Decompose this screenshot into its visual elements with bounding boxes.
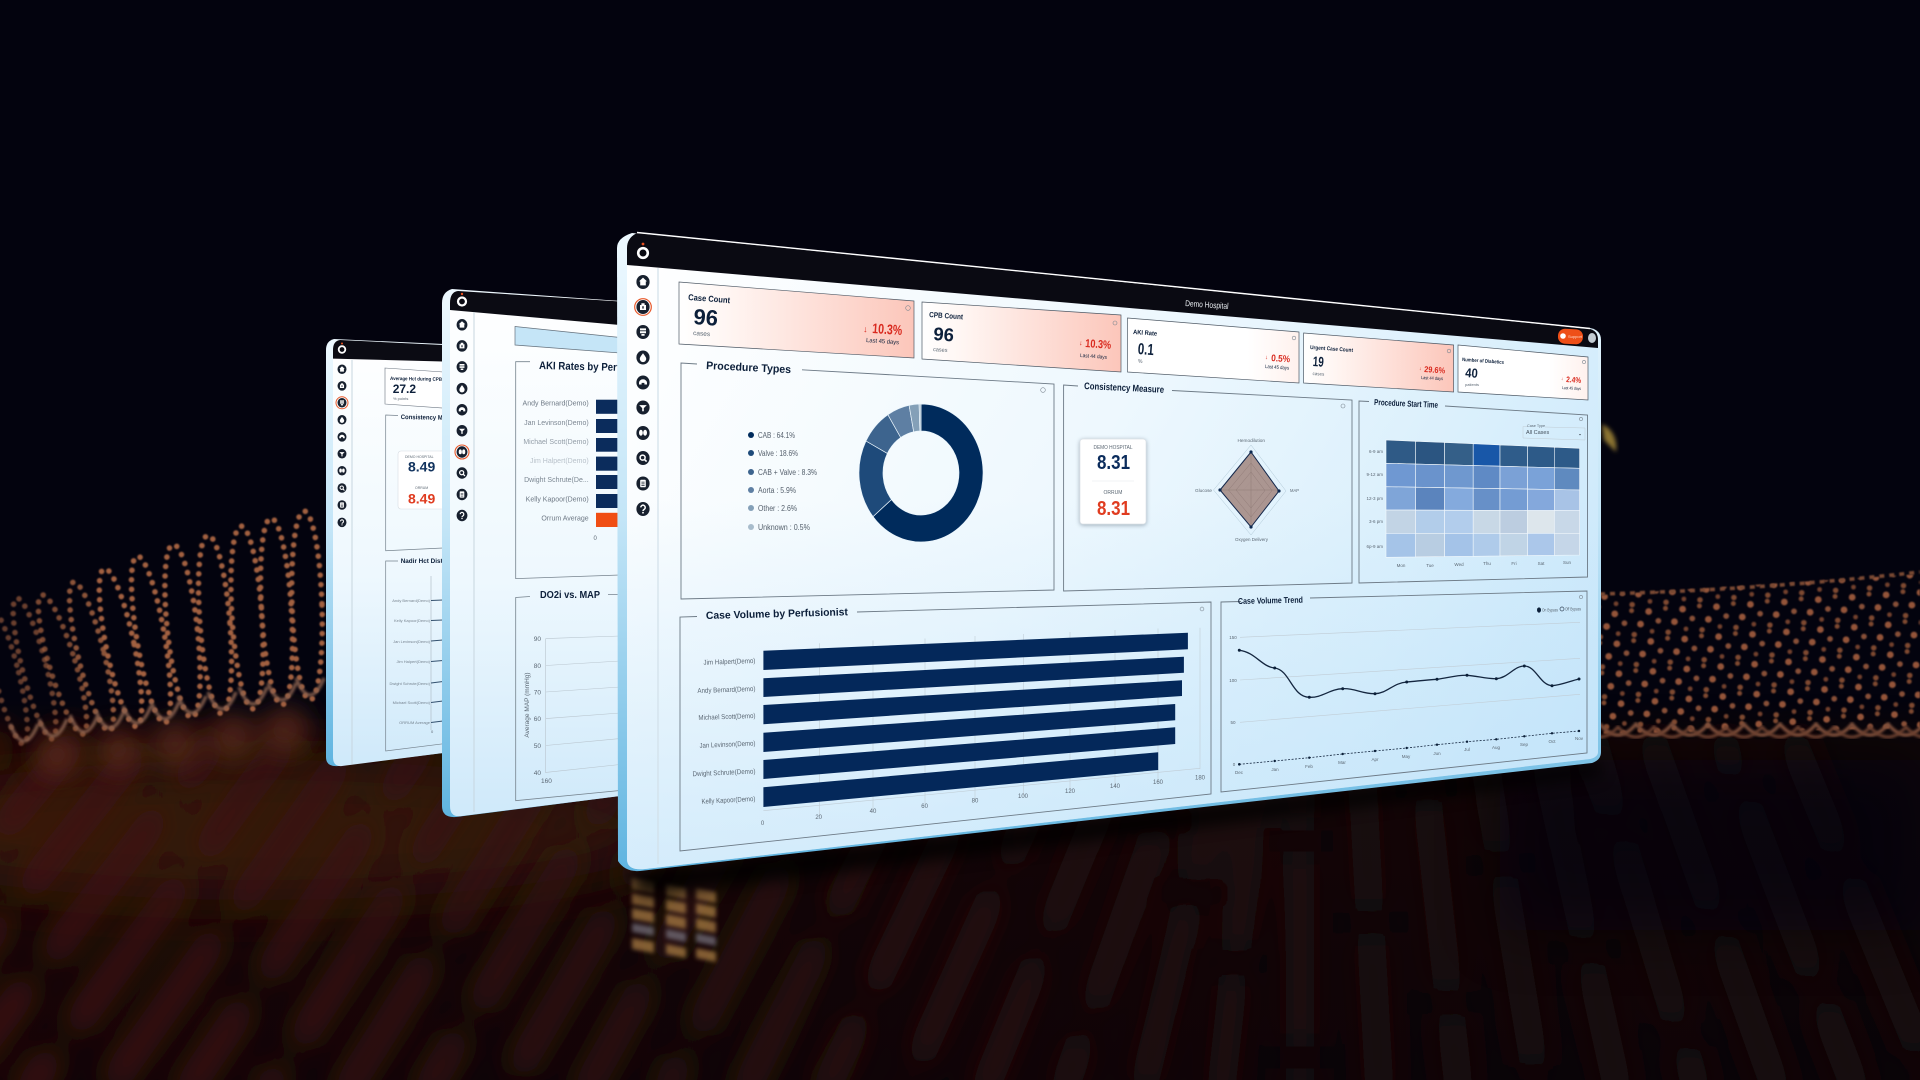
- donut legend: CAB + Valve : 8.3%: [758, 468, 817, 477]
- card: case count: 10.3%: [872, 320, 903, 338]
- card: case count: Case Count: [688, 292, 731, 305]
- user avatar: [1588, 333, 1596, 343]
- main window shadow: [627, 762, 1600, 897]
- window 2 face: [450, 291, 620, 816]
- trend axis labels: 50: [1230, 720, 1236, 725]
- bar chart axis values: [761, 776, 1206, 827]
- window 2 panel: DO2i vs MAP: [516, 589, 620, 801]
- donut legend: Other : 2.6%: [758, 504, 797, 513]
- bar chart names: Andy Bernard(Demo): [697, 686, 756, 695]
- trend axis labels: Mar: [1338, 760, 1346, 765]
- trend axis labels: May: [1402, 754, 1411, 759]
- bar chart axis values: 140: [1110, 784, 1121, 790]
- heatmap axis labels: Fri: [1511, 561, 1517, 566]
- metric box: 8.31: [1097, 452, 1130, 474]
- background: left particle helix: [0, 511, 325, 777]
- window 3 panel: Nadir Hct distribution: Nadir Hct Dist: [401, 558, 444, 565]
- background: floor with blurred stripes: [0, 700, 1920, 1080]
- trend axis labels: Jul: [1464, 747, 1470, 752]
- bar chart axis values: 100: [1018, 794, 1029, 800]
- window 2 panel: DO2i vs MAP: 70: [534, 690, 541, 696]
- sidebar: [657, 268, 659, 864]
- donut legend: Unknown : 0.5%: [758, 523, 810, 532]
- card: AKI rate: AKI Rate: [1133, 329, 1158, 338]
- donut legend: Aorta : 5.9%: [758, 486, 796, 495]
- window 3 frame: [326, 339, 443, 766]
- donut chart: [859, 404, 983, 542]
- window 3 panel: consistency: DEMO HOSPITAL: [405, 455, 434, 459]
- window 3 panel: Nadir Hct distribution: Michael Scott(Demo): [393, 700, 431, 705]
- bar chart names: Dwight Schrute(Demo): [692, 768, 756, 778]
- window 3 card: average Hct: Average Hct during CPB: [390, 376, 442, 383]
- bar chart names: Jim Halpert(Demo): [703, 658, 756, 667]
- trend axis labels: Sep: [1520, 742, 1528, 747]
- panel: case volume by perfusionist: [680, 602, 1211, 851]
- bar chart axis values: 80: [972, 799, 979, 805]
- window 3 panel: Nadir Hct distribution: Jan Levinson(Demo): [393, 639, 431, 644]
- trend legend: On Bypass: [1542, 608, 1558, 612]
- card: CPB count: [922, 302, 1121, 372]
- main window frame: [617, 233, 1601, 871]
- card: AKI rate: %: [1138, 359, 1143, 365]
- window 2 panel: AKI rates: Kelly Kapoor(Demo): [526, 496, 589, 503]
- metric box: 8.31: [1097, 498, 1130, 520]
- window 3 panel: consistency: [386, 414, 458, 551]
- window 2 panel: DO2i vs MAP: 60: [534, 716, 541, 723]
- heatmap axis labels: [1366, 449, 1571, 568]
- window 2 panel: AKI rates: Jim Halpert(Demo): [530, 458, 589, 465]
- window 3 panel: consistency: ORRUM: [415, 486, 428, 490]
- card: urgent case count: Last 44 days: [1421, 375, 1444, 381]
- radar chart: [1195, 438, 1299, 543]
- window 3 face: [333, 340, 443, 766]
- card: urgent case count: Urgent Case Count: [1310, 345, 1353, 354]
- window 2 panel: DO2i vs MAP: 50: [534, 743, 541, 750]
- card: urgent case count: ↓: [1419, 366, 1422, 372]
- window 2 panel: AKI rates: 0: [594, 536, 598, 542]
- trend legend: [1537, 606, 1581, 613]
- card: case count: cases: [693, 330, 711, 338]
- card: CPB count: cases: [933, 347, 948, 354]
- trend legend: Off Bypass: [1565, 606, 1581, 612]
- bar chart names: [692, 658, 756, 806]
- sidebar icons: [635, 275, 651, 516]
- window 2 logo: [458, 293, 466, 306]
- card: CPB count: 96: [933, 323, 955, 345]
- bar chart: [763, 633, 1188, 807]
- heatmap axis labels: 12-3 pm: [1366, 496, 1383, 501]
- metric box: [1080, 439, 1146, 524]
- trend axis labels: [1229, 635, 1584, 775]
- header title: Demo Hospital: [1185, 298, 1229, 311]
- case type dropdown: Case Type: [1527, 424, 1545, 428]
- card: number of diabetics: patients: [1465, 382, 1479, 387]
- trend axis labels: 0: [1233, 762, 1236, 767]
- heading: case volume by perfusionist: Case Volume by Perfusionist: [706, 606, 849, 622]
- card: number of diabetics: Number of Diabetics: [1462, 357, 1504, 366]
- window 2 panel: AKI rates: Andy Bernard(Demo): [523, 400, 589, 407]
- card: case count: [679, 282, 914, 358]
- donut legend: [748, 431, 817, 532]
- window 2 panel: AKI rates: Jan Levinson(Demo): [524, 420, 589, 427]
- radar chart: Oxygen Delivery: [1235, 537, 1269, 543]
- bar chart axis values: 120: [1065, 789, 1076, 795]
- window 3 panel: Nadir Hct distribution: Dwight Schrute(Demo): [390, 681, 431, 686]
- window 2 panel: DO2i vs MAP: 90: [534, 636, 541, 643]
- bar chart names: Michael Scott(Demo): [698, 713, 756, 722]
- window 3 panel: Nadir Hct distribution: Jim Halpert(Demo): [396, 659, 431, 664]
- bar chart axis values: 40: [870, 809, 877, 815]
- heatmap axis labels: 9-12 am: [1366, 472, 1383, 477]
- main window face lower tint: [627, 500, 1598, 869]
- window 2 panel: AKI rates: AKI Rates by Perf: [539, 360, 620, 374]
- donut legend: Valve : 18.6%: [758, 449, 798, 458]
- card: CPB count: Last 44 days: [1080, 353, 1108, 361]
- window 3 top bar: [333, 340, 443, 362]
- trend axis labels: Feb: [1305, 764, 1313, 769]
- window 2 panel: DO2i vs MAP: 80: [534, 663, 541, 670]
- window 3: back dashboard: [326, 339, 458, 766]
- bar chart axis values: 20: [815, 815, 823, 821]
- heatmap axis labels: Sun: [1563, 560, 1571, 565]
- metric box: ORRUM: [1104, 490, 1122, 496]
- panel: procedure start time: [1359, 397, 1588, 583]
- background: right particle band: [1582, 572, 1920, 737]
- window 2 panel: DO2i vs MAP: Average MAP (mmHg): [524, 672, 531, 738]
- card: CPB count: CPB Count: [929, 310, 964, 321]
- bar chart names: Kelly Kapoor(Demo): [701, 796, 756, 806]
- card: number of diabetics: ↓: [1561, 376, 1564, 381]
- logo: [638, 243, 648, 258]
- window 3 panel: Nadir Hct distribution: [386, 558, 444, 751]
- support button: Support: [1568, 334, 1583, 339]
- card: number of diabetics: Last 45 days: [1562, 385, 1581, 391]
- window 2 frame: [442, 289, 620, 817]
- heatmap axis labels: Sat: [1538, 561, 1545, 566]
- window 2 panel: AKI rates: [516, 360, 620, 579]
- window 3 panel: Nadir Hct distribution: ORRUM Average: [399, 720, 431, 725]
- card: CPB count: ↓: [1079, 340, 1083, 347]
- trend axis labels: Jun: [1433, 751, 1441, 756]
- card: urgent case count: 19: [1312, 353, 1325, 370]
- window 3 sidebar icons: [336, 365, 348, 527]
- window 3 panel: Nadir Hct distribution: Kelly Kapoor(Demo): [394, 618, 431, 623]
- panel: case volume trend: [1221, 591, 1587, 792]
- card: urgent case count: 29.6%: [1424, 364, 1446, 375]
- card: urgent case count: [1304, 333, 1454, 392]
- card: AKI rate: 0.1: [1137, 341, 1154, 359]
- case type dropdown: All Cases: [1526, 430, 1549, 436]
- bar chart axis values: 60: [921, 804, 929, 810]
- window 3 panel: consistency: 8.49: [408, 459, 435, 475]
- heatmap axis labels: 3-6 pm: [1369, 519, 1383, 524]
- window 2 panel: DO2i vs MAP: DO2i vs. MAP: [540, 589, 600, 601]
- main window top bar: [627, 233, 1598, 348]
- window 3 panel: consistency: Consistency M: [401, 414, 443, 422]
- window 2 panel: AKI rates: Dwight Schrute(De...: [524, 477, 589, 484]
- card: case count: 96: [693, 304, 719, 331]
- main window face: [627, 233, 1598, 869]
- window 2 panel: AKI rates: Michael Scott(Demo): [523, 439, 589, 446]
- trend axis labels: Nov: [1575, 736, 1584, 741]
- window 2 sidebar icons: [455, 319, 469, 521]
- window 2 top card: [515, 326, 620, 353]
- trend axis labels: 100: [1229, 678, 1237, 683]
- bar chart gridlines: [763, 628, 1200, 816]
- bar chart axis values: 0: [761, 821, 765, 827]
- window 2 top bar: [450, 291, 620, 325]
- metric box: DEMO HOSPITAL: [1094, 445, 1133, 451]
- trend axis labels: 150: [1229, 635, 1237, 640]
- window 2 panel: DO2i vs MAP: 160: [541, 778, 552, 785]
- case type dropdown: [1523, 424, 1585, 440]
- trend axis labels: Oct: [1548, 739, 1556, 744]
- donut legend: CAB : 64.1%: [758, 431, 795, 440]
- heading: procedure types: Procedure Types: [706, 360, 791, 376]
- background: yellow glow behind main window: [1602, 424, 1616, 452]
- trend axis labels: Dec: [1235, 770, 1244, 775]
- window 3 panel: consistency: 8.49: [408, 490, 435, 506]
- card: case count: ↓: [863, 324, 868, 334]
- trend axis labels: Apr: [1371, 757, 1379, 762]
- bar chart names: Jan Levinson(Demo): [699, 740, 756, 750]
- heatmap axis labels: Thu: [1483, 561, 1491, 566]
- window 3 logo: [339, 342, 345, 353]
- trend gridlines: [1240, 622, 1580, 722]
- window 3 sidebar divider: [351, 360, 353, 764]
- window 3 card: average Hct: [385, 368, 443, 408]
- heatmap axis labels: Wed: [1454, 562, 1464, 567]
- line chart: off bypass: [1238, 730, 1580, 766]
- bar chart axis values: 160: [1153, 780, 1164, 786]
- radar chart: MAP: [1290, 488, 1299, 494]
- window 2 sidebar divider: [473, 312, 475, 812]
- radar chart: Glucose: [1195, 488, 1212, 494]
- line chart: on bypass: [1238, 649, 1580, 699]
- card: number of diabetics: 2.4%: [1566, 375, 1581, 385]
- window 3 card: average Hct: % points: [393, 396, 408, 401]
- card: number of diabetics: 40: [1465, 365, 1478, 381]
- card: AKI rate: Last 45 days: [1265, 364, 1290, 372]
- radar chart: Hemodilution: [1238, 438, 1265, 444]
- trend axis labels: Jan: [1271, 767, 1279, 772]
- support button: [1558, 328, 1583, 345]
- window 2 panel: AKI rates: Orrum Average: [541, 516, 589, 523]
- card: case count: Last 45 days: [866, 338, 899, 346]
- card: AKI rate: 0.5%: [1271, 353, 1291, 365]
- heatmap axis labels: Tue: [1426, 563, 1434, 568]
- window 2 panel: DO2i vs MAP: 40: [534, 770, 541, 777]
- window 3 card: average Hct: 27.2: [393, 382, 416, 396]
- card: number of diabetics: [1458, 345, 1588, 400]
- card: CPB count: 10.3%: [1085, 338, 1112, 352]
- heatmap: [1386, 440, 1580, 557]
- card: AKI rate: ↓: [1265, 355, 1268, 361]
- heading: consistency measure: Consistency Measure: [1084, 381, 1164, 396]
- window 2: middle dashboard: [442, 289, 620, 817]
- window 3 panel: Nadir Hct distribution: 0: [431, 729, 434, 734]
- heatmap axis labels: Mon: [1397, 563, 1406, 568]
- card: AKI rate: [1128, 318, 1299, 383]
- heading: procedure start time: Procedure Start Time: [1374, 397, 1438, 410]
- reflection: blurred amber grid below main window: [632, 878, 716, 962]
- main window: dashboard: [617, 232, 1601, 871]
- panel: consistency measure: [1064, 381, 1352, 591]
- main window top highlight: [637, 232, 1590, 328]
- heatmap axis labels: 6p-9 am: [1366, 544, 1383, 549]
- card: urgent case count: cases: [1312, 371, 1325, 377]
- heading: case volume trend: Case Volume Trend: [1238, 595, 1303, 606]
- trend axis labels: Aug: [1492, 745, 1500, 750]
- window 3 panel: Nadir Hct distribution: Andy Bernard(Demo): [392, 598, 431, 603]
- panel: procedure types: [681, 360, 1054, 599]
- bar chart axis values: 180: [1195, 776, 1206, 782]
- heatmap axis labels: 6-9 am: [1369, 449, 1383, 454]
